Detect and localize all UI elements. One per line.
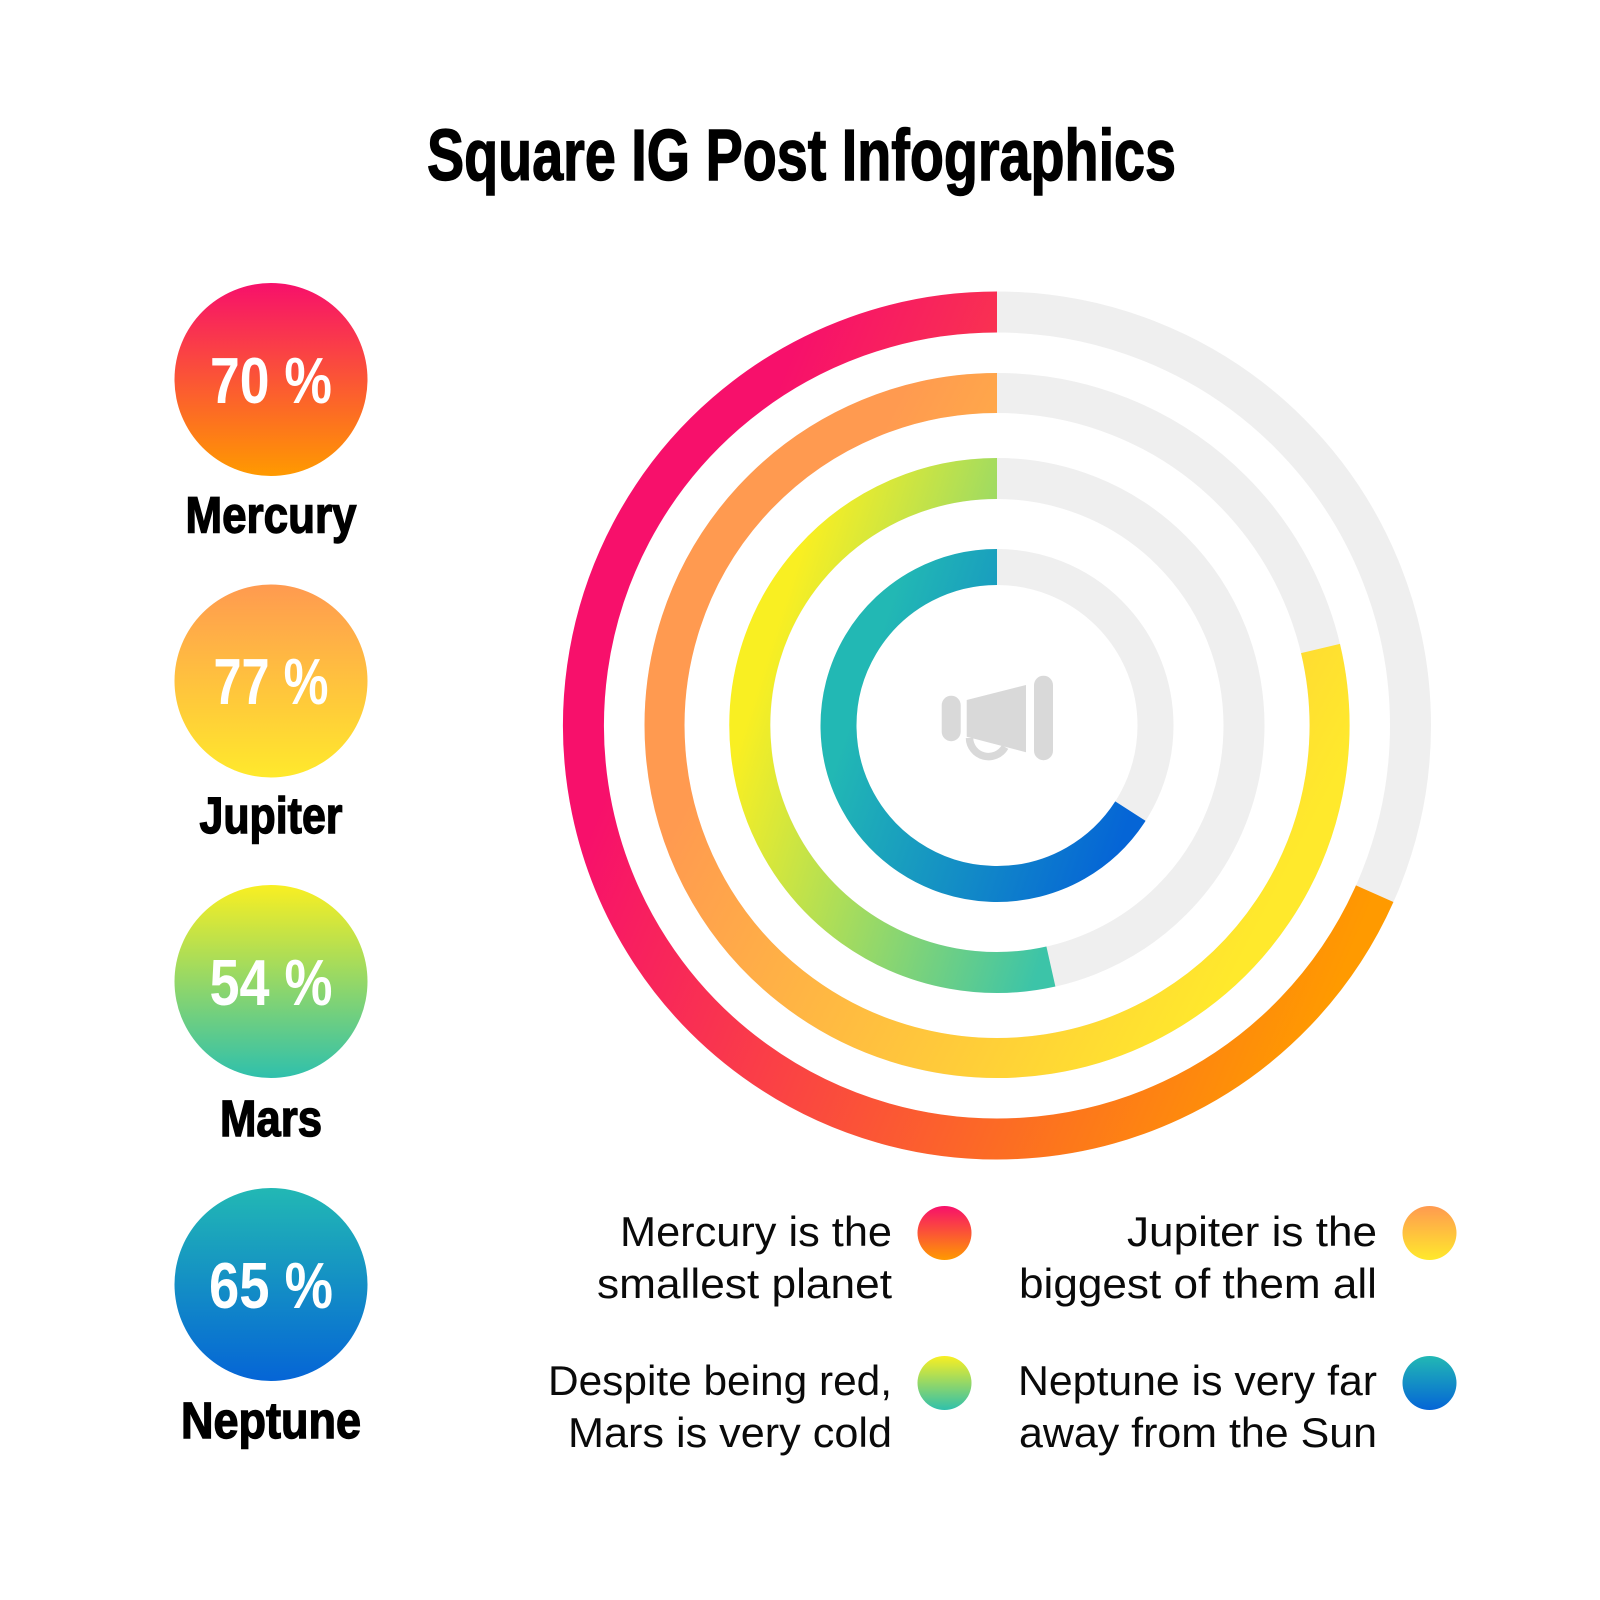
legend item: Jupiter: Jupiter is the (1127, 1208, 1377, 1255)
chart: concentric radial progress rings (583, 312, 1410, 1139)
legend (548, 1206, 1456, 1456)
legend item: Mercury: Mercury is the (620, 1208, 892, 1255)
badge: Neptune 65%: Neptune (181, 1392, 361, 1449)
icon: megaphone (942, 676, 1053, 760)
badge: Mercury 70% (174, 283, 368, 544)
badge: Jupiter 77%: Jupiter (200, 787, 343, 844)
ring: Mars (750, 478, 1244, 972)
legend item: Mercury: smallest planet (597, 1260, 892, 1307)
legend item: Mars (548, 1356, 972, 1456)
legend item: Mercury (597, 1206, 972, 1307)
legend item: Jupiter: biggest of them all (1019, 1260, 1377, 1307)
legend item: Neptune (1018, 1356, 1456, 1456)
ring: Neptune (838, 567, 1156, 884)
legend item: Mars: Despite being red, (548, 1357, 892, 1404)
badge: Mars 54%: 54 % (210, 946, 332, 1019)
badge: Jupiter 77% (174, 584, 368, 844)
badge: Mars 54% (174, 885, 368, 1147)
badge: Mercury 70%: Mercury (186, 486, 357, 544)
panel: planet percentage badges (174, 283, 368, 1449)
badge: Neptune 65% (174, 1188, 368, 1449)
badge: Neptune 65%: 65 % (209, 1249, 333, 1322)
legend item: Mars: Mars is very cold (568, 1409, 892, 1456)
legend item: Neptune: Neptune is very far (1018, 1357, 1377, 1404)
badge: Jupiter 77%: 77 % (214, 645, 328, 718)
legend item: Neptune: away from the Sun (1019, 1409, 1377, 1456)
ring: Jupiter (664, 393, 1330, 1058)
badge: Mercury 70%: 70 % (210, 344, 332, 417)
title: Square IG Post Infographics (427, 116, 1176, 196)
ring: Mercury (583, 312, 1410, 1139)
badge: Mars 54%: Mars (220, 1090, 322, 1147)
legend item: Jupiter (1019, 1206, 1456, 1307)
